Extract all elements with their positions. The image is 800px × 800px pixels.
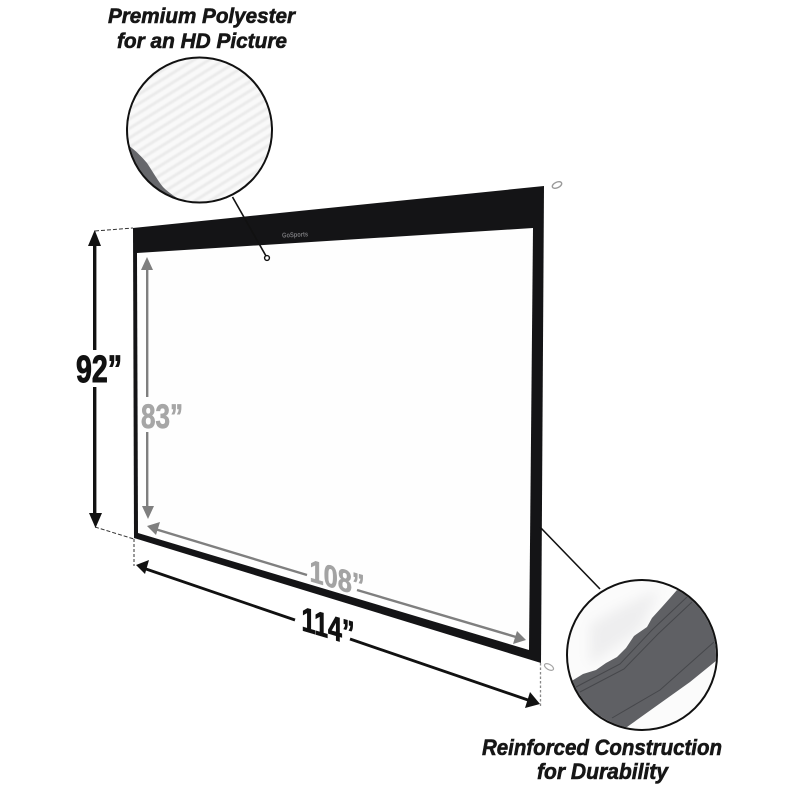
dimension arrow: 83 inch height — [141, 257, 183, 519]
dimension label: 108: 108” — [310, 552, 364, 604]
dimension label: 83: 83” — [141, 398, 183, 436]
dimension arrow: 92 inch height — [76, 230, 122, 528]
icon: top hanging loop — [551, 180, 563, 190]
dimension arrow: 114 inch width — [136, 560, 540, 708]
connector line: polyester callout — [232, 197, 269, 260]
heading: premium polyester — [108, 5, 297, 53]
heading: premium polyester: for an HD Picture — [117, 30, 287, 53]
callout: polyester fabric detail circle — [126, 56, 273, 204]
screen white surface — [137, 228, 533, 650]
projector screen — [133, 186, 544, 663]
heading: reinforced construction: for Durability — [537, 759, 670, 784]
dimension label: 92: 92” — [76, 349, 122, 391]
heading: premium polyester: Premium Polyester — [108, 5, 297, 28]
connector line: reinforced callout — [540, 527, 600, 589]
screen black frame — [133, 186, 544, 663]
brand logo: GoSports — [282, 231, 308, 240]
dashed guide lines — [95, 228, 540, 707]
dimension label: 114: 114” — [301, 601, 355, 654]
callout: reinforced edge detail circle — [566, 579, 718, 731]
dimension arrow: 108 inch width — [147, 522, 526, 644]
heading: reinforced construction — [482, 735, 722, 784]
icon: bottom hanging loop — [543, 662, 555, 672]
heading: reinforced construction: Reinforced Construction — [482, 735, 722, 760]
